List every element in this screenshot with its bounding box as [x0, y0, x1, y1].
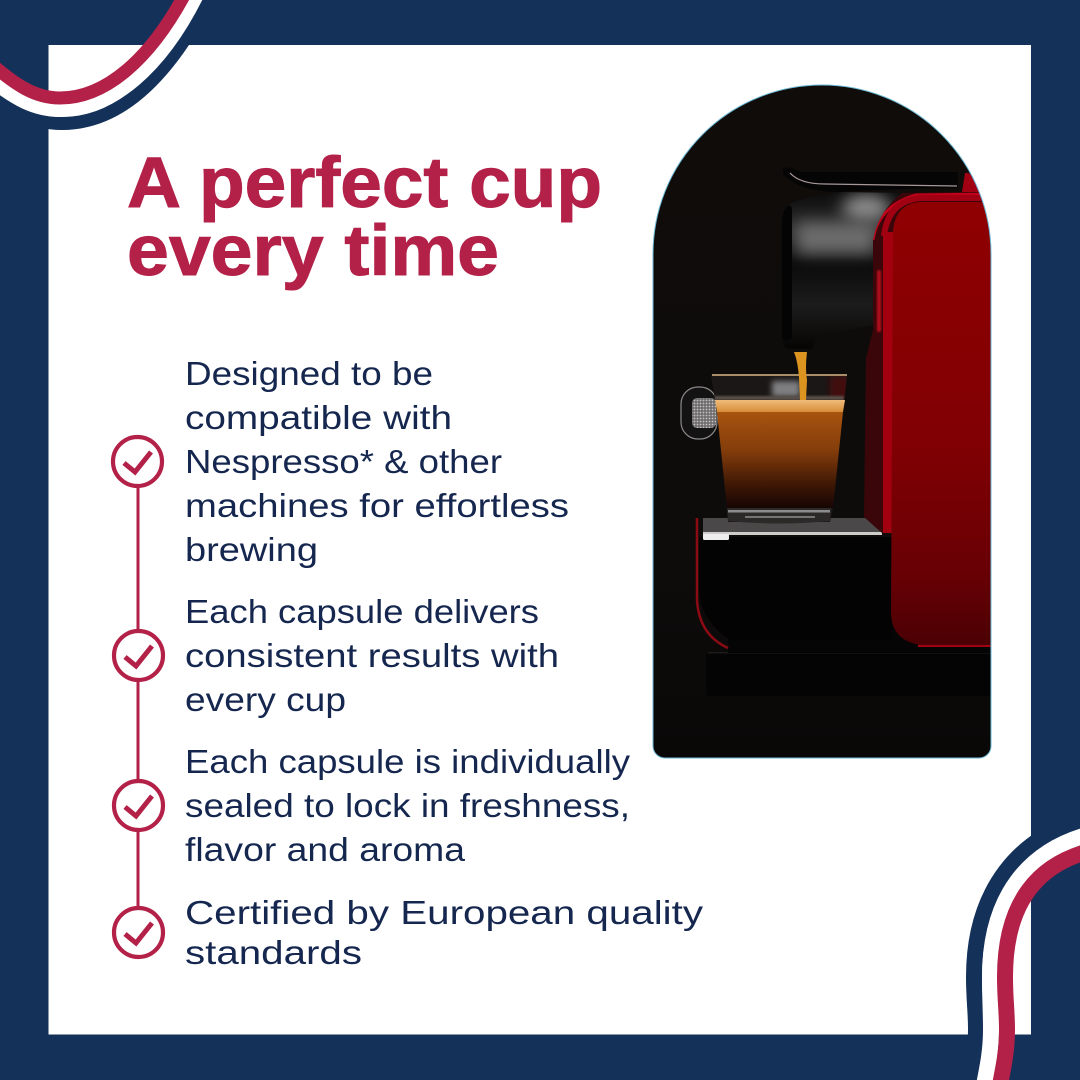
title: [127, 144, 602, 291]
photo outline: [653, 85, 991, 758]
text: compatibility benefit: Nespresso* & other: [185, 443, 502, 480]
drip tray: [703, 518, 882, 540]
title: A perfect cup: [127, 144, 602, 223]
cup handle: [681, 387, 717, 439]
photo backdrop: [653, 85, 991, 758]
coffee stream: [794, 352, 807, 400]
text: consistency benefit: Each capsule delivers: [185, 593, 539, 630]
red machine body: [864, 173, 995, 645]
text: freshness benefit: sealed to lock in freshness,: [185, 787, 630, 824]
icon: check circle 1: [113, 437, 162, 486]
black brew head: [782, 168, 958, 349]
text: freshness benefit: flavor and aroma: [185, 831, 466, 868]
text: certification benefit: [185, 894, 704, 971]
text: certification benefit: Certified by European quality: [185, 894, 704, 931]
icon: check circle 3: [114, 781, 163, 830]
text: compatibility benefit: [185, 355, 569, 568]
espresso cup: [681, 374, 850, 524]
text: consistency benefit: consistent results with: [185, 637, 559, 674]
text: certification benefit: standards: [185, 934, 362, 971]
timeline connector: [136, 488, 140, 907]
photo: espresso machine in arched frame: [653, 85, 998, 758]
text: consistency benefit: every cup: [185, 681, 346, 718]
text: compatibility benefit: compatible with: [185, 399, 452, 436]
icon: check circle 2: [114, 631, 163, 680]
text: compatibility benefit: Designed to be: [185, 355, 433, 392]
top-left corner ribbons: [0, 0, 212, 124]
icon: check circle 4: [114, 908, 163, 957]
text: consistency benefit: [185, 593, 559, 718]
machine base: [696, 518, 990, 656]
title: every time: [127, 212, 499, 291]
bottom-right corner ribbons: [968, 818, 1080, 1080]
text: freshness benefit: Each capsule is individually: [185, 743, 631, 780]
text: freshness benefit: [185, 743, 631, 868]
text: compatibility benefit: machines for effortless: [185, 487, 569, 524]
text: compatibility benefit: brewing: [185, 531, 318, 568]
